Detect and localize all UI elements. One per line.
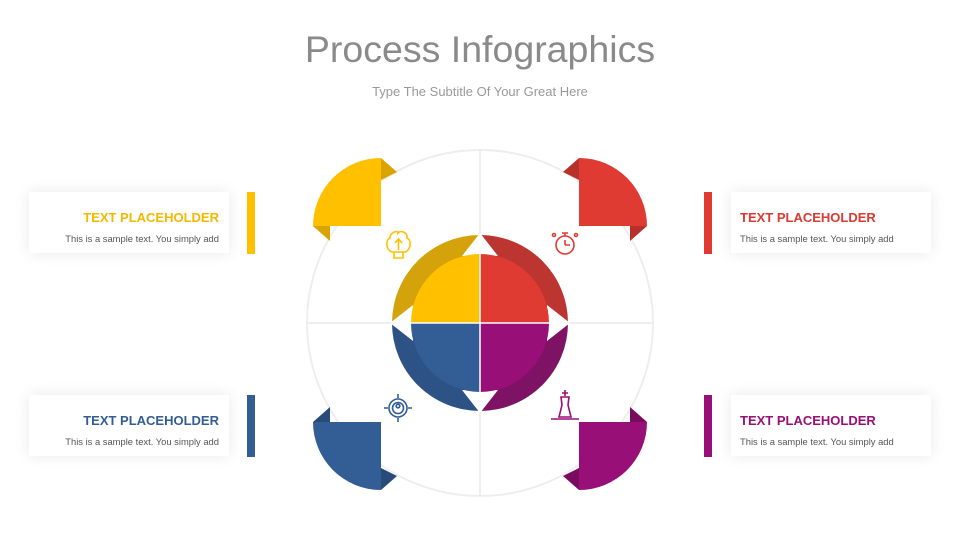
outer circle	[307, 150, 653, 496]
card: top right: This is a sample text. You simply add	[740, 233, 894, 244]
icon: target person	[384, 394, 412, 422]
icon: brain bulb	[387, 232, 410, 258]
bar: red	[704, 192, 712, 254]
card: bottom left: TEXT PLACEHOLDER	[83, 413, 219, 428]
corner: purple	[563, 407, 647, 490]
card: top right: TEXT PLACEHOLDER	[740, 210, 876, 225]
bar: purple	[704, 395, 712, 457]
center disk	[411, 254, 549, 392]
card: bottom left: This is a sample text. You simply add	[65, 436, 219, 447]
center ring	[390, 233, 570, 413]
corner: yellow	[313, 158, 397, 241]
icon: chess king	[551, 390, 579, 419]
card: bottom right	[731, 395, 931, 456]
card: bottom right: TEXT PLACEHOLDER	[740, 413, 876, 428]
card: bottom right: This is a sample text. You simply add	[740, 436, 894, 447]
subtitle: Type The Subtitle Of Your Great Here	[372, 84, 588, 99]
title: Process Infographics	[305, 28, 655, 70]
icon: stopwatch	[552, 233, 578, 254]
card: top left: This is a sample text. You simply add	[65, 233, 219, 244]
card: top right	[731, 192, 931, 253]
card: top left: TEXT PLACEHOLDER	[83, 210, 219, 225]
bar: yellow	[247, 192, 255, 254]
card: bottom left	[29, 395, 229, 456]
corner: blue	[313, 407, 397, 490]
card: top left	[29, 192, 229, 253]
bar: blue	[247, 395, 255, 457]
corner: red	[563, 158, 647, 241]
